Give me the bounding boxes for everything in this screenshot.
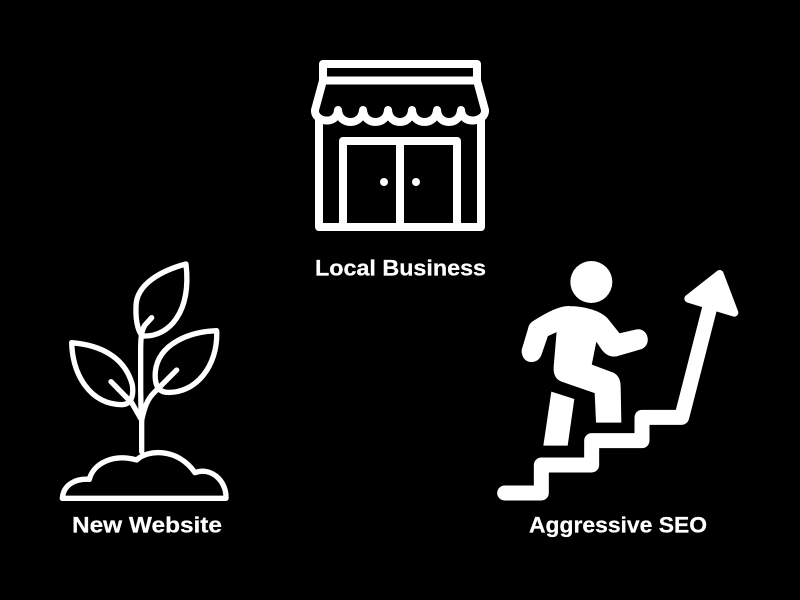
icon: sprout [62,264,226,498]
panel: aggressive SEO [505,261,734,538]
panel: new website [62,264,226,538]
icon: person climbing stairs with arrow [505,261,734,493]
arrowhead [688,274,734,313]
panel: local business [315,64,486,280]
person back leg [543,392,574,446]
stairs and rising arrow [505,307,710,493]
label: Aggressive SEO: Aggressive SEO [529,512,707,538]
label: New Website: New Website [72,512,222,538]
label: Local Business: Local Business [315,256,486,280]
person head [570,261,612,303]
person body [522,307,647,422]
icon: storefront [315,64,485,227]
